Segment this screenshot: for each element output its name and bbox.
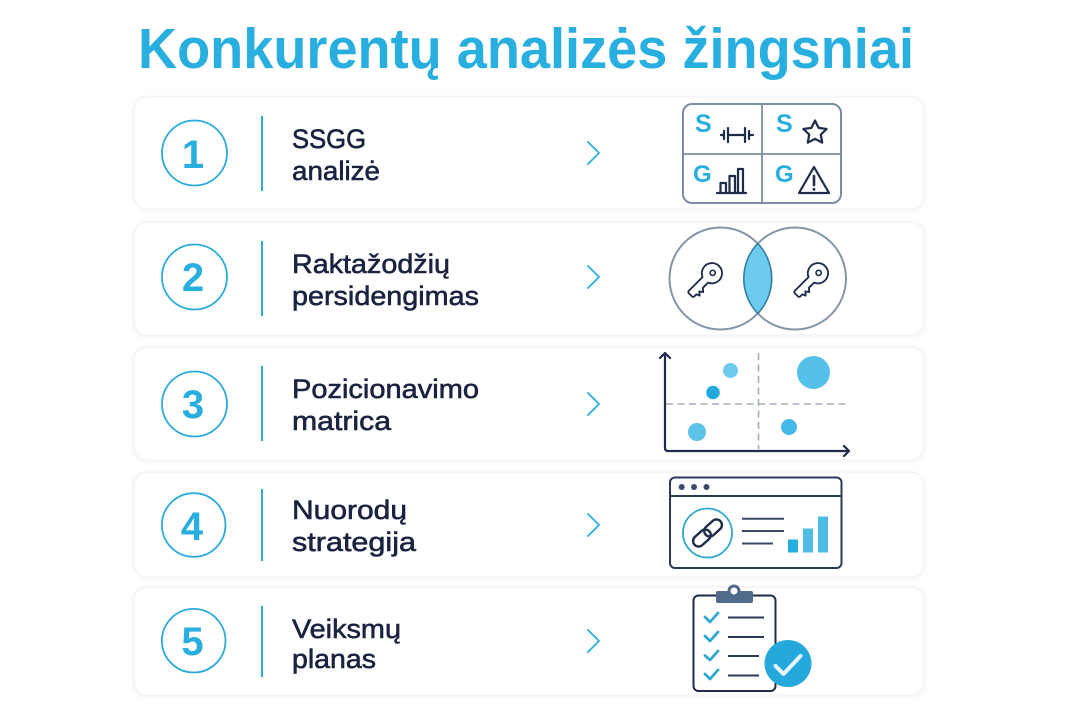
label: Nuorodų strategija [292, 495, 417, 557]
number badge 1 [162, 120, 227, 186]
number badge 3: 3 [182, 383, 204, 427]
label: Veiksmų planas: Veiksmų [292, 614, 401, 644]
icon: SWOT grid: G [775, 161, 794, 188]
label: Veiksmų planas: planas [292, 644, 376, 674]
icon: SWOT grid [683, 104, 841, 203]
label: Raktažodžių persidengimas [292, 249, 479, 311]
number badge 2: 2 [182, 256, 204, 300]
label: SSGG analizė [292, 124, 380, 186]
label: SSGG analizė: analizė [292, 156, 380, 186]
panel: step 5 action plan [134, 586, 924, 695]
number badge 4 [162, 493, 226, 557]
panel: step 3 positioning matrix [134, 347, 924, 460]
icon: SWOT grid: S [695, 110, 712, 138]
label: Pozicionavimo matrica: matrica [292, 406, 392, 436]
label: Raktažodžių persidengimas: Raktažodžių [292, 249, 450, 279]
label: Raktažodžių persidengimas: persidengimas [292, 281, 479, 311]
label: Pozicionavimo matrica: Pozicionavimo [292, 374, 479, 404]
panel: step 2 keyword overlap [134, 222, 924, 335]
arrow 4 [588, 514, 599, 536]
icon: keyword Venn diagram [670, 228, 846, 330]
number badge 5 [162, 609, 226, 672]
arrow 2 [588, 266, 599, 288]
icon: left key [683, 259, 726, 302]
icon: browser window with link [670, 478, 842, 568]
icon: clipboard checklist [694, 586, 812, 691]
icon: SWOT grid: S [776, 110, 793, 138]
title: Konkurentų analizės žingsniai [138, 17, 914, 81]
panel: step 4 link strategy [134, 472, 924, 577]
panel: step 1 SSGG analysis [134, 97, 924, 209]
icon: right key [789, 259, 832, 302]
icon: scatter matrix [660, 353, 849, 456]
label: Nuorodų strategija: Nuorodų [292, 495, 407, 525]
arrow 5 [588, 630, 599, 652]
label: Nuorodų strategija: strategija [292, 527, 417, 557]
label: Pozicionavimo matrica [292, 374, 479, 436]
arrow 1 [588, 142, 599, 164]
number badge 4: 4 [181, 505, 204, 549]
label: Veiksmų planas [292, 614, 401, 674]
icon: SWOT grid: G [693, 161, 712, 188]
number badge 5: 5 [181, 620, 204, 664]
number badge 3 [162, 372, 227, 436]
number badge 1: 1 [182, 133, 204, 177]
number badge 2 [162, 244, 227, 310]
label: SSGG analizė: SSGG [292, 124, 366, 154]
arrow 3 [588, 393, 599, 415]
